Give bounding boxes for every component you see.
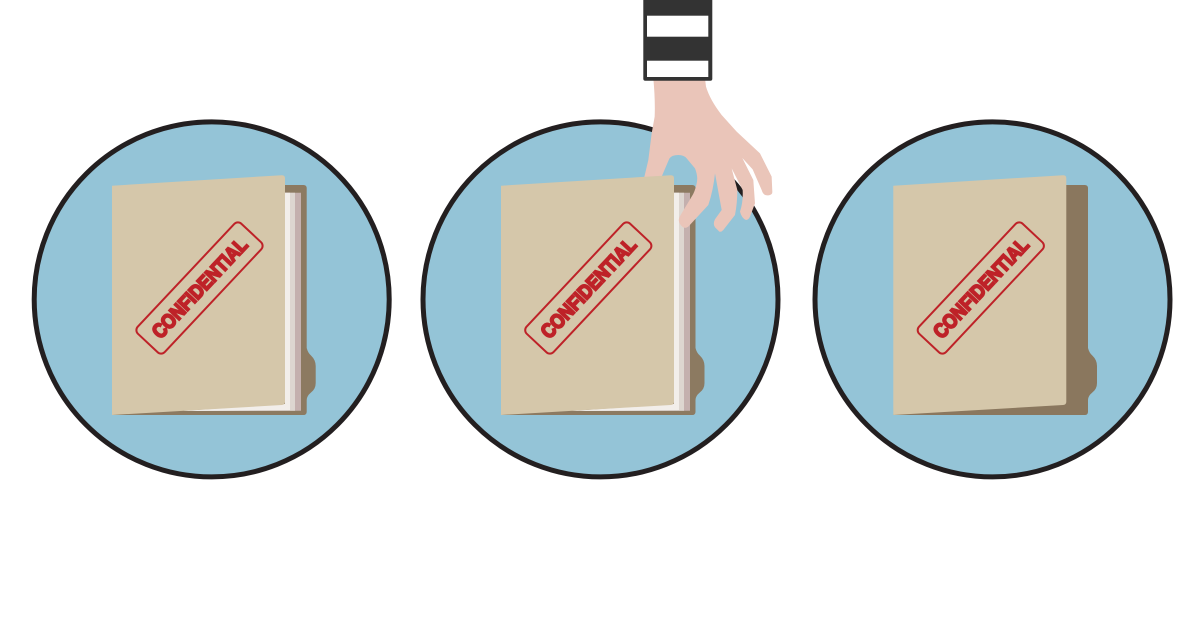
- folder front: [501, 175, 674, 415]
- paper pages: [572, 193, 690, 411]
- folder back: [501, 185, 704, 415]
- icon: reaching hand: [644, 78, 772, 232]
- icon: striped sleeve cuff: [643, 0, 712, 81]
- folder back: [893, 185, 1097, 415]
- circle background: [423, 122, 778, 477]
- circle background: [815, 122, 1170, 477]
- folder front: [112, 175, 285, 415]
- panel: right circle with empty folder: [815, 122, 1170, 477]
- paper pages: [183, 193, 301, 411]
- confidential stamp: CONFIDENTIAL: [537, 234, 641, 343]
- folder front: [893, 175, 1066, 415]
- confidential stamp: CONFIDENTIAL: [929, 234, 1034, 343]
- circle background: [34, 122, 389, 477]
- folder back: [112, 185, 316, 415]
- confidential stamp: CONFIDENTIAL: [148, 234, 252, 343]
- panel: left circle with folder: [34, 122, 389, 477]
- panel: middle circle with folder and hand: [423, 0, 778, 477]
